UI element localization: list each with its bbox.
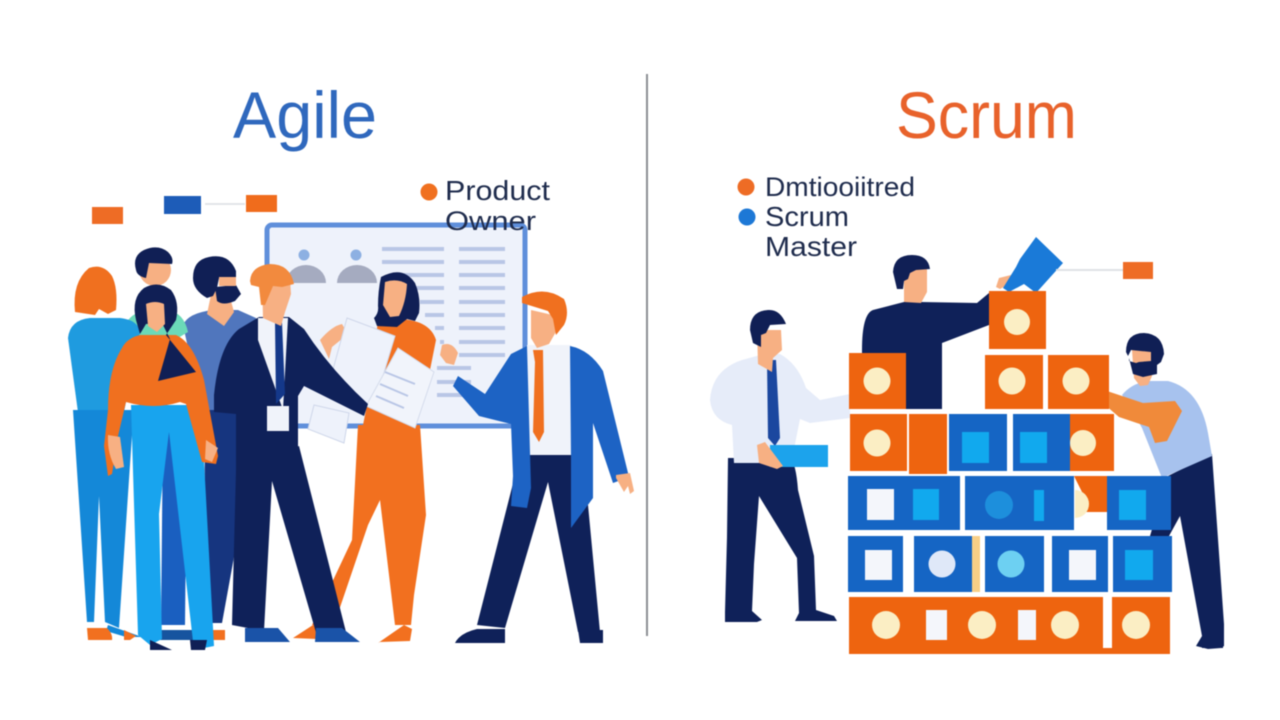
- light icons on blocks: [865, 489, 1096, 640]
- tool: blue paintbrush with connector: [1003, 237, 1153, 293]
- person: man in navy sweater: [862, 255, 1011, 474]
- panel: Scrum team illustration: [710, 172, 1224, 654]
- title: Scrum: Scrum: [896, 78, 1077, 152]
- legend: Scrum roles: Scrum: [765, 201, 849, 232]
- person: bearded man in light blue shirt: [1090, 333, 1224, 649]
- center divider: [646, 74, 648, 636]
- legend: Scrum roles: Dmtiooiitred: [765, 172, 915, 202]
- cream circles: [864, 309, 1150, 639]
- block stack: [848, 291, 1172, 654]
- person: woman with orange hair, light blue outfit: [68, 267, 143, 640]
- documents: [308, 318, 434, 443]
- person: back man with green shirt: [124, 247, 194, 640]
- person: woman in orange top and blue trousers: [104, 284, 218, 650]
- person: man in navy suit with orange hair: [214, 264, 368, 642]
- legend: Scrum roles: [738, 172, 915, 262]
- blue blocks: [848, 414, 1172, 592]
- legend: Product Owner: Owner: [445, 206, 536, 236]
- flow markers: [92, 195, 277, 224]
- orange blocks: [849, 291, 1170, 654]
- panel: Agile team illustration: [68, 175, 634, 650]
- title: Agile: Agile: [233, 78, 377, 152]
- legend: Product Owner: [420, 175, 550, 236]
- person: man in blue shirt with beard: [183, 256, 260, 640]
- cyan icons on blocks: [913, 432, 1153, 580]
- person: man in blue coat with orange tie: [440, 291, 634, 643]
- person: man in white shirt and tie: [710, 310, 850, 622]
- legend: Product Owner: Product: [445, 175, 550, 206]
- legend: Scrum roles: Master: [765, 231, 857, 262]
- whiteboard: [267, 225, 525, 426]
- person: woman in orange outfit: [293, 272, 436, 643]
